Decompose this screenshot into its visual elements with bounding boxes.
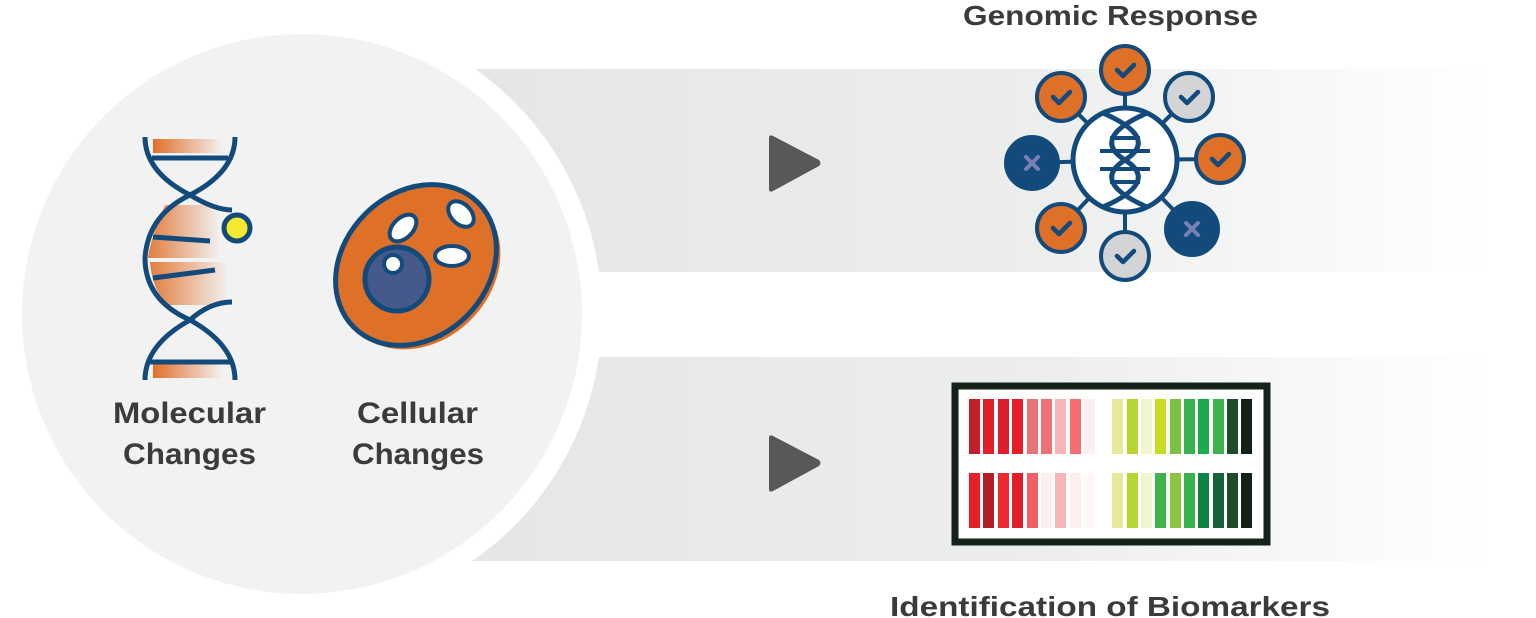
text: molecular changes: Molecular [113,397,266,430]
text: molecular changes: Changes [123,438,256,471]
icon: genomic network [1006,46,1244,280]
chart: biomarker heatmap [955,386,1267,542]
panel: top band [470,69,1490,272]
heading: genomic response: Genomic Response [963,0,1258,31]
arrow: top [769,135,820,192]
icon: DNA with molecule [145,137,250,380]
panel: changes circle [22,34,582,594]
arrow: bottom [769,435,820,492]
icon: cell [303,152,533,382]
text: cellular changes: Changes [352,438,484,471]
text: cellular changes: Cellular [357,397,478,430]
panel: bottom band [470,357,1490,561]
